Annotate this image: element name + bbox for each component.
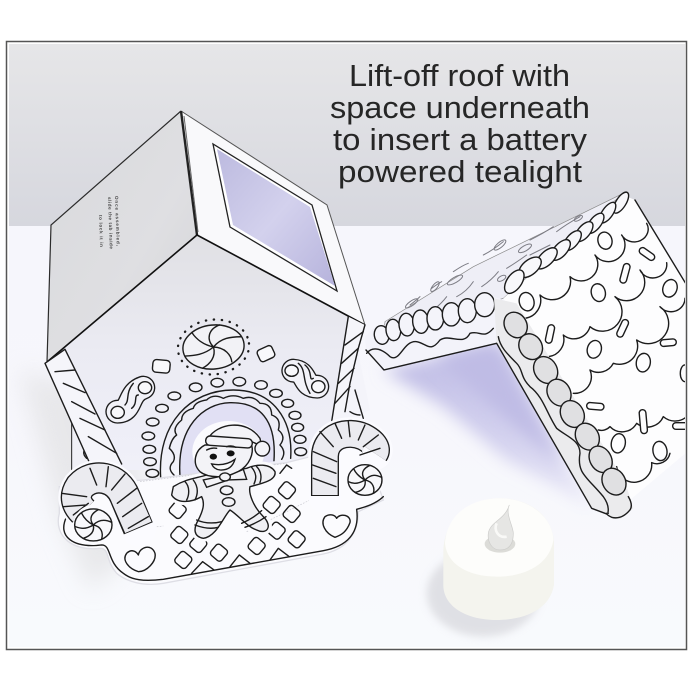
roof front slope with icing — [503, 198, 685, 483]
heart right — [323, 515, 350, 537]
roof back slope — [383, 193, 623, 337]
scalloped icing lines — [525, 223, 693, 482]
lattice of icing squares — [168, 465, 307, 573]
roof underside — [384, 344, 581, 497]
head — [195, 445, 252, 477]
roof near gable strip — [365, 293, 503, 370]
wall instructions small print: Once assembled, — [114, 196, 121, 246]
wall instructions small print: to lock it in — [98, 215, 104, 247]
swirl candy left — [111, 382, 152, 418]
tealight flame — [485, 505, 515, 553]
house: left side wall — [47, 111, 197, 362]
caption text: space underneath — [330, 90, 590, 125]
ridge icing scallops on top edge — [501, 190, 632, 297]
caption text: to insert a battery — [333, 122, 588, 157]
house: front wall — [47, 235, 365, 470]
roof right gable strip — [494, 298, 633, 519]
house: base platform behind — [71, 389, 364, 470]
peppermint right — [347, 464, 383, 496]
soft floor shadows — [26, 376, 145, 580]
icing rounded squares — [152, 345, 276, 373]
candy cane right — [313, 422, 384, 499]
tabletop — [9, 226, 685, 434]
wall instructions small print: slide the tab inside — [107, 197, 114, 249]
skylight window — [213, 144, 337, 291]
bow tie and buttons — [203, 469, 247, 487]
caption text: Lift-off roof with — [349, 58, 570, 93]
sleeve and foot stripes — [185, 467, 266, 528]
caption text: powered tealight — [338, 154, 582, 189]
heart left — [125, 547, 155, 572]
peppermint left — [73, 505, 113, 545]
gingerbread house — [45, 111, 384, 584]
caption text — [330, 58, 590, 189]
santa hat — [208, 425, 262, 446]
swirl candy right — [285, 363, 325, 393]
background wall — [9, 44, 685, 226]
peppermint decoration — [175, 316, 252, 378]
lifted-off roof — [365, 190, 693, 519]
battery tealight — [427, 498, 554, 637]
right striped wall edge — [332, 317, 365, 422]
face — [210, 454, 217, 460]
arched doorway — [160, 390, 291, 477]
gingerbread man — [172, 421, 275, 538]
house: roof panel with window — [181, 111, 365, 325]
wall instructions small print — [98, 196, 121, 249]
left striped wall edge — [45, 349, 122, 475]
icing dots around door — [142, 377, 307, 477]
sprinkles — [517, 230, 690, 462]
base platform — [58, 443, 383, 584]
candy cane left — [62, 467, 148, 545]
